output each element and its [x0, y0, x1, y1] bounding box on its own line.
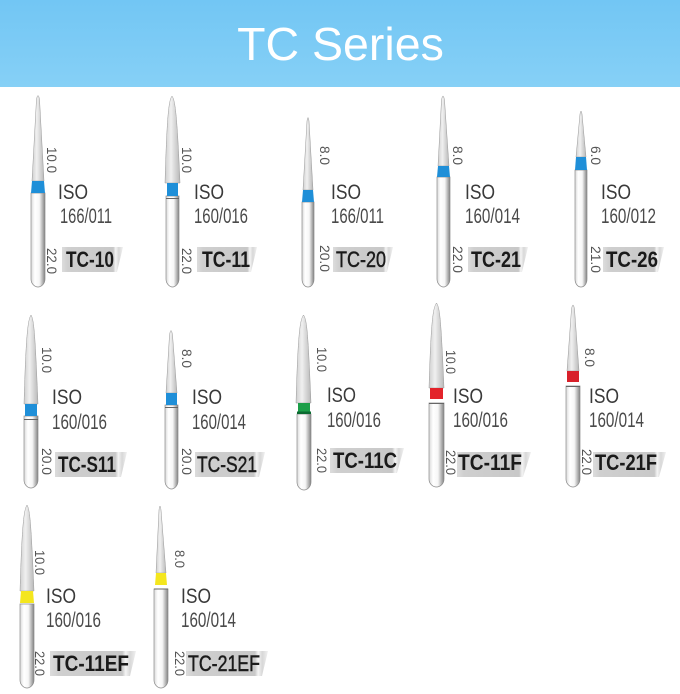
- product: TC-21EF: ISO: [181, 585, 211, 608]
- product: TC-S11: ISO: [52, 386, 82, 409]
- product: TC-S11: [24, 315, 127, 488]
- title: TC Series: [237, 18, 444, 70]
- product: TC-11C: ISO: [327, 384, 356, 407]
- product: TC-21: TC-21: [471, 247, 521, 272]
- product: TC-S21: 20.0: [179, 448, 195, 475]
- product: TC-26: TC-26: [606, 247, 658, 272]
- product: TC-S11: TC-S11: [58, 452, 116, 477]
- product: TC-26: [575, 111, 664, 287]
- product: TC-11F: 22.0: [443, 450, 459, 475]
- product: TC-11: [165, 96, 257, 287]
- product: TC-21F: TC-21F: [595, 450, 657, 475]
- product: TC-11C: 160/016: [327, 409, 381, 432]
- product: TC-21EF: 8.0: [172, 550, 188, 568]
- product: TC-11F: 160/016: [453, 409, 508, 432]
- product: TC-11EF: [20, 505, 136, 688]
- header banner: [0, 0, 680, 87]
- product: TC-11EF: 22.0: [32, 651, 48, 676]
- product: TC-21F: 160/014: [589, 409, 644, 432]
- product: TC-21: ISO: [465, 181, 495, 204]
- product: TC-20: [302, 118, 393, 287]
- product: TC-21F: 8.0: [582, 348, 598, 367]
- product: TC-10: TC-10: [66, 247, 114, 272]
- product: TC-20: 20.0: [317, 245, 333, 272]
- product: TC-S11: 10.0: [39, 347, 55, 373]
- product: TC-11C: 10.0: [314, 347, 330, 372]
- product: TC-26: 160/012: [601, 205, 656, 228]
- product: TC-10: 166/011: [60, 205, 112, 228]
- product: TC-21EF: 160/014: [181, 609, 236, 632]
- product: TC-20: 166/011: [331, 205, 384, 228]
- product: TC-11EF: 160/016: [46, 609, 101, 632]
- product: TC-21: 22.0: [450, 246, 466, 273]
- product: TC-S21: ISO: [192, 386, 222, 409]
- product: TC-S21: TC-S21: [197, 452, 257, 477]
- product: TC-11: ISO: [194, 181, 224, 204]
- product: TC-11: 160/016: [194, 205, 248, 228]
- product: TC-10: 10.0: [44, 147, 60, 173]
- product: TC-26: ISO: [601, 181, 631, 204]
- product: TC-26: 21.0: [588, 246, 604, 273]
- product: TC-21F: [566, 305, 666, 487]
- product: TC-20: ISO: [331, 181, 361, 204]
- product: TC-21F: 22.0: [579, 449, 595, 475]
- product: TC-26: 6.0: [588, 146, 604, 165]
- product: TC-21EF: [154, 506, 268, 688]
- product: TC-11F: ISO: [453, 385, 483, 408]
- product: TC-S11: 20.0: [39, 448, 55, 475]
- product: TC-21: 160/014: [465, 205, 520, 228]
- product: TC-S11: 160/016: [52, 411, 107, 434]
- product: TC-11: TC-11: [202, 247, 250, 272]
- product: TC-S21: 160/014: [192, 411, 246, 434]
- product: TC-S21: [165, 330, 265, 489]
- product: TC-11EF: ISO: [46, 585, 76, 608]
- product: TC-10: ISO: [58, 181, 88, 204]
- product: TC-11: 10.0: [179, 147, 195, 173]
- product: TC-11F: 10.0: [443, 350, 459, 374]
- product: TC-11C: TC-11C: [333, 448, 397, 473]
- product: TC-10: 22.0: [44, 248, 60, 274]
- product: TC-11F: TC-11F: [458, 450, 522, 475]
- product: TC-21EF: 22.0: [172, 651, 188, 676]
- product: TC-20: 8.0: [317, 146, 333, 165]
- product: TC-20: TC-20: [336, 247, 386, 272]
- product: TC-11: 22.0: [179, 248, 195, 274]
- product: TC-11F: [429, 303, 531, 487]
- product: TC-10: [31, 96, 123, 287]
- product: TC-11C: [296, 315, 404, 490]
- product: TC-S21: 8.0: [179, 349, 195, 368]
- product: TC-21: [437, 96, 528, 287]
- product: TC-11EF: TC-11EF: [53, 651, 129, 676]
- product: TC-11C: 22.0: [314, 448, 330, 473]
- product: TC-21F: ISO: [589, 385, 619, 408]
- product: TC-21: 8.0: [450, 146, 466, 165]
- product: TC-11EF: 10.0: [32, 550, 48, 575]
- product: TC-21EF: TC-21EF: [188, 651, 260, 676]
